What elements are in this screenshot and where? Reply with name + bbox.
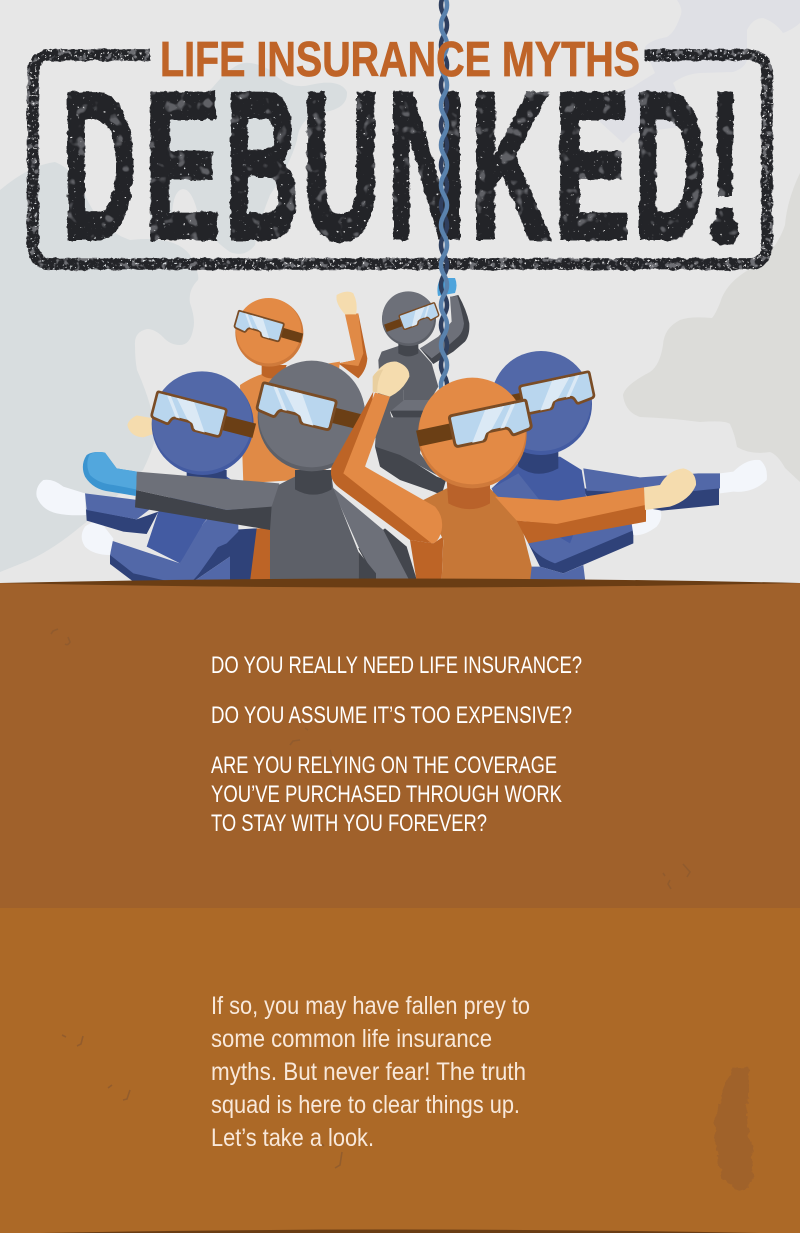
stain — [714, 1068, 754, 1190]
questions text: YOU’VE PURCHASED THROUGH WORK — [211, 781, 562, 808]
figure: front orange — [331, 362, 696, 582]
stamp frame — [33, 55, 767, 264]
title: LIFE INSURANCE MYTHS: LIFE INSURANCE MYTHS — [160, 33, 640, 87]
questions text: DO YOU ASSUME IT’S TOO EXPENSIVE? — [211, 702, 572, 729]
background — [0, 0, 800, 600]
questions text — [211, 652, 582, 837]
word: DEBUNKED!: D — [634, 50, 706, 283]
smoke cloud: left — [0, 162, 198, 572]
intro text: Let’s take a look. — [211, 1124, 374, 1152]
smoke cloud: top right — [600, 0, 800, 143]
bottom ground edge — [40, 1230, 760, 1233]
word: DEBUNKED!: E — [554, 50, 630, 283]
icon: blue hand on rope — [437, 278, 456, 296]
intro text: squad is here to clear things up. — [211, 1091, 520, 1119]
ground edge — [0, 578, 800, 588]
questions text: TO STAY WITH YOU FOREVER? — [211, 810, 487, 837]
intro text: myths. But never fear! The truth — [211, 1058, 526, 1086]
word: DEBUNKED! — [62, 50, 742, 283]
panel: upper brown — [0, 583, 800, 909]
figure: front gray — [83, 361, 417, 582]
word: DEBUNKED!: U — [302, 50, 380, 283]
figure: right blue — [488, 351, 767, 582]
intro text: some common life insurance — [211, 1025, 492, 1053]
figure: left blue — [36, 371, 258, 582]
word: DEBUNKED!: K — [470, 50, 550, 283]
figure: back orange — [127, 292, 367, 582]
intro text: If so, you may have fallen prey to — [211, 992, 530, 1020]
smoke cloud: upper left — [150, 63, 347, 254]
figure: small gray climber — [375, 291, 469, 495]
smoke cloud: right — [623, 173, 800, 482]
questions text: ARE YOU RELYING ON THE COVERAGE — [211, 752, 557, 779]
word: DEBUNKED!: D — [62, 50, 136, 283]
text: ! — [708, 50, 742, 283]
word: DEBUNKED!: B — [225, 50, 299, 283]
word: DEBUNKED!: E — [144, 50, 221, 283]
scratch marks — [51, 629, 690, 1168]
questions text: DO YOU REALLY NEED LIFE INSURANCE? — [211, 652, 582, 679]
intro text — [211, 992, 530, 1152]
panel: lower brown — [0, 908, 800, 1233]
rope — [441, 0, 447, 395]
word: DEBUNKED!: N — [387, 50, 466, 283]
